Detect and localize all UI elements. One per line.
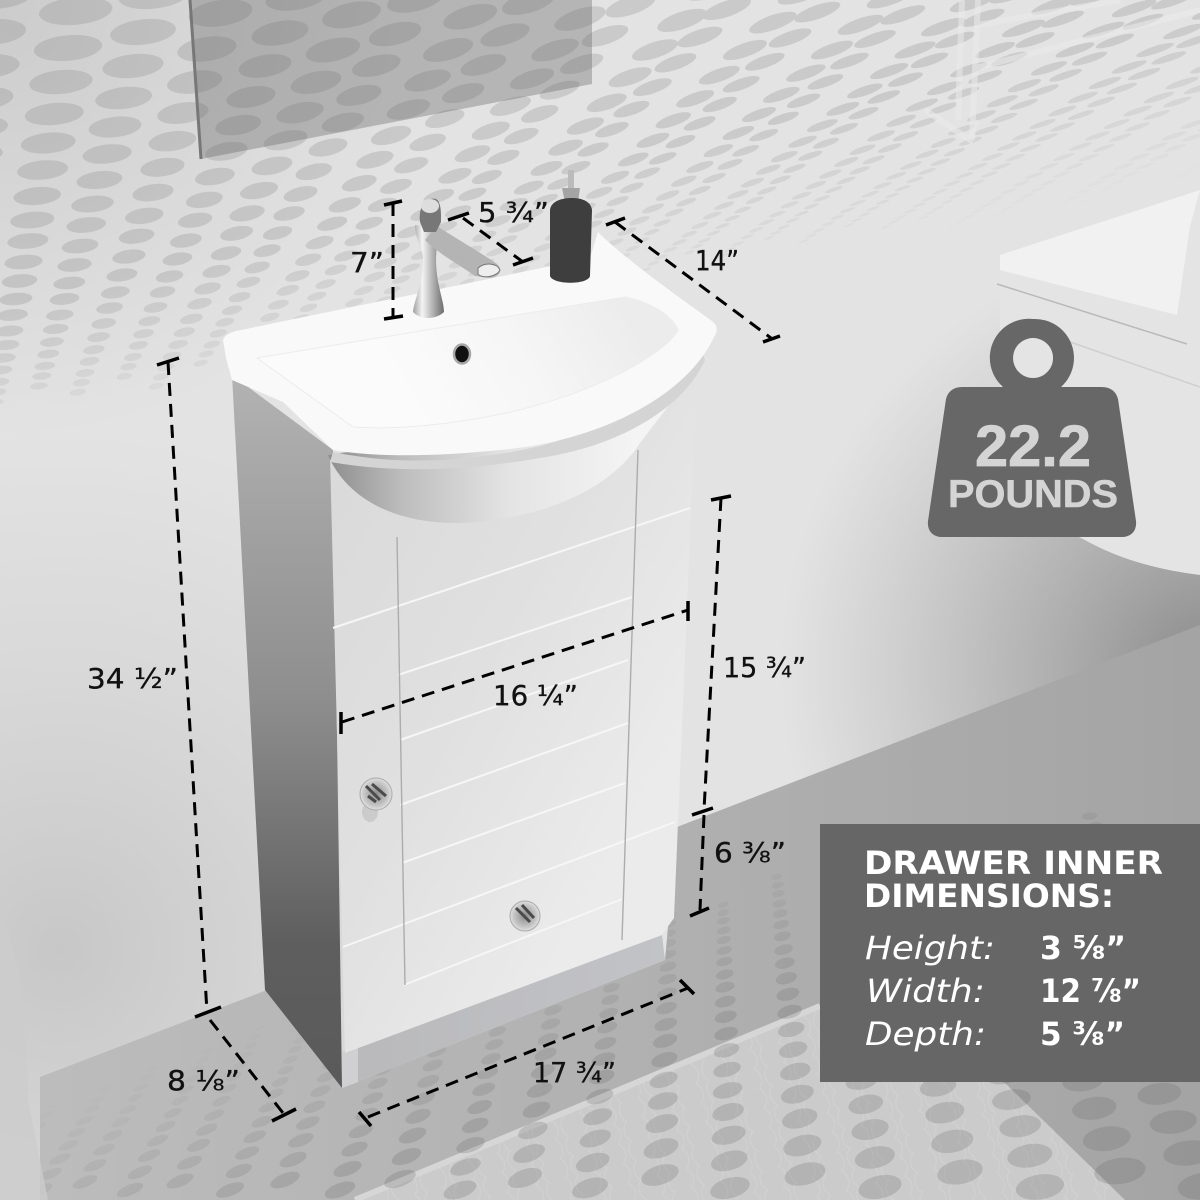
floor <box>40 625 1200 1200</box>
cabinet front <box>330 370 697 1053</box>
icon: weight <box>928 319 1136 537</box>
dimension: depth 8 1/8: 8 ⅛” <box>167 1064 240 1097</box>
faucet <box>413 199 500 318</box>
vanity cabinet <box>232 370 697 1088</box>
panel rows <box>865 929 1141 1053</box>
dimension: 15 3/4 <box>704 496 806 810</box>
sink basin <box>223 170 717 523</box>
door knob <box>360 778 392 822</box>
weight badge <box>928 319 1136 537</box>
dimension: 5 3/4: 5 ¾” <box>478 196 549 229</box>
dimension: overall height 34 1/2 <box>87 358 221 1017</box>
cabinet side panel <box>232 375 342 1088</box>
toilet <box>997 190 1200 575</box>
weight badge: 22.2 <box>975 414 1091 479</box>
rug <box>355 1006 1125 1200</box>
panel rows: Depth: <box>865 1015 986 1053</box>
dimension: 15 3/4: 15 ¾” <box>723 651 806 684</box>
soap dispenser <box>550 170 592 283</box>
drain <box>454 344 470 364</box>
dimension: 5 3/4 <box>448 196 549 265</box>
left toilet silhouette <box>0 920 48 1200</box>
dimension: faucet height 7 <box>350 201 403 319</box>
dimension: width 17 3/4 <box>359 980 694 1126</box>
wall dot pattern <box>0 0 1200 408</box>
towel rail <box>925 0 1200 140</box>
dimension: overall height 34 1/2: 34 ½” <box>87 662 178 695</box>
plinth <box>342 935 665 1088</box>
panel rows: 5 ⅜” <box>1040 1015 1125 1053</box>
weight badge: POUNDS <box>948 473 1118 516</box>
panel rows: 12 ⅞” <box>1040 972 1141 1010</box>
panel rows: Height: <box>865 929 995 967</box>
panel heading: DIMENSIONS: <box>864 877 1114 915</box>
dimension: 14: 14” <box>695 244 739 277</box>
floor dot pattern <box>0 807 1200 1200</box>
panel heading: DRAWER INNER <box>864 844 1163 882</box>
drawer knob <box>510 901 540 931</box>
dimension: 6 3/8: 6 ⅜” <box>714 836 786 869</box>
basin top <box>223 232 717 455</box>
dimension: 6 3/8 <box>690 808 786 916</box>
dimension: width 17 3/4: 17 ¾” <box>533 1056 616 1089</box>
basin underside <box>328 375 692 523</box>
mirror <box>190 0 592 159</box>
panel rows: 3 ⅝” <box>1040 929 1126 967</box>
dimension: depth 8 1/8 <box>167 1020 296 1121</box>
dimension: 16 1/4: 16 ¼” <box>493 679 578 712</box>
panel heading <box>864 844 1163 915</box>
panel rows: Width: <box>866 972 985 1010</box>
panel: drawer inner dimensions <box>820 824 1200 1082</box>
dimension: faucet height 7: 7” <box>350 246 384 279</box>
dimension: 16 1/4 <box>341 601 688 734</box>
dimension: 14 <box>606 218 780 342</box>
